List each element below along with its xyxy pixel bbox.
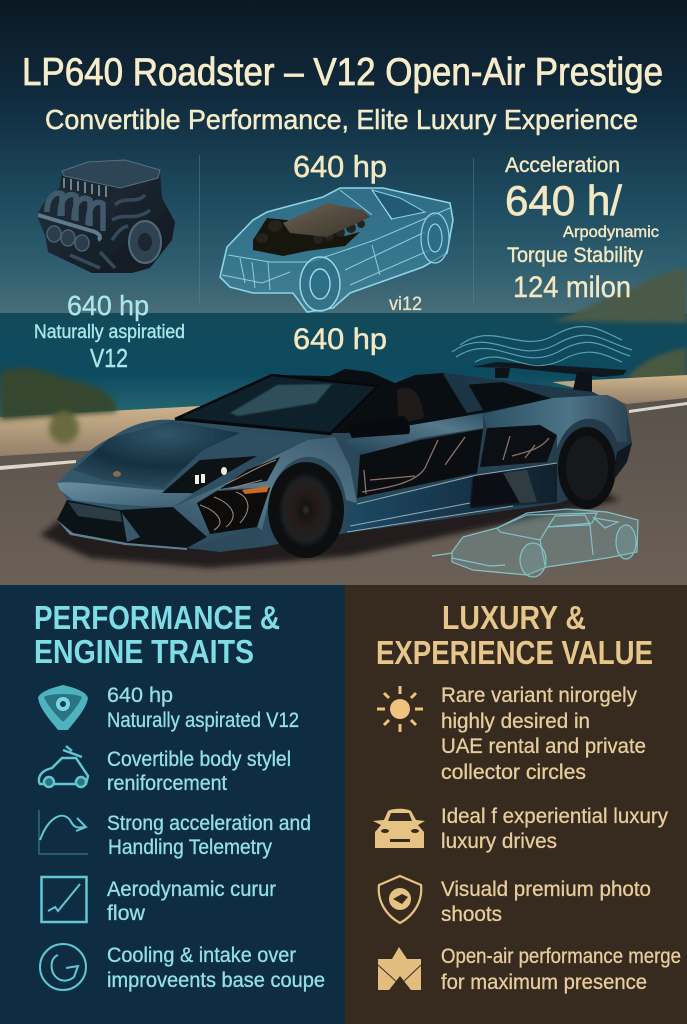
text: item 2: luxury drives <box>441 830 557 853</box>
stat: 640 hp top: 640 hp <box>293 149 387 184</box>
seat <box>397 388 424 424</box>
center fin <box>122 513 140 542</box>
stat column: acceleration: Arpodynamic <box>563 224 659 241</box>
body <box>57 395 632 550</box>
icon: star emblem <box>378 947 421 990</box>
right splitter <box>187 527 266 552</box>
icon: convertible car <box>39 746 88 787</box>
background: roadside barrier right <box>552 375 687 404</box>
side intake shadow <box>470 472 520 508</box>
text: item 1 <box>107 684 299 732</box>
subtitle: Convertible Performance, Elite Luxury Experience <box>45 104 638 135</box>
manifold bar <box>38 215 100 240</box>
icon: acceleration chart <box>39 810 88 854</box>
heading: performance: PERFORMANCE & <box>34 599 280 636</box>
text: item 2 <box>107 748 291 795</box>
text: item 1: 640 hp <box>107 684 173 707</box>
sill highlights <box>347 463 557 532</box>
text: item 5: Cooling & intake over <box>107 944 296 967</box>
stat column: engine: 640 hp <box>67 290 149 321</box>
lower bumper <box>57 500 207 548</box>
heading: performance <box>34 599 280 670</box>
text: item 1: Naturally aspirated V12 <box>107 709 299 732</box>
icon: car front <box>373 809 425 848</box>
panel: luxury and experience value <box>345 585 687 1024</box>
text: item 2: Ideal f experiential luxury <box>441 805 668 828</box>
front fender arc <box>173 437 357 538</box>
stat column: engine: Naturally aspiratied <box>34 322 185 343</box>
headlight lamps <box>195 467 227 484</box>
background: roadside barrier left <box>0 406 200 456</box>
stat column: acceleration: 640 h/ <box>505 177 622 224</box>
exposed engine <box>253 203 370 256</box>
heading: luxury <box>376 599 653 671</box>
text: item 3 <box>107 812 311 859</box>
icon: aero square <box>42 877 86 922</box>
engine illustration <box>37 160 175 273</box>
windshield frame <box>175 375 378 434</box>
text: item 5 <box>107 944 325 992</box>
background: roadside bush <box>0 368 116 444</box>
rear upper body <box>483 395 627 448</box>
hood <box>73 421 240 488</box>
text: item 4 <box>107 878 276 925</box>
stat column: engine <box>34 290 185 373</box>
lower side panel <box>347 463 557 532</box>
background: road line right <box>629 402 687 413</box>
text: item 4: flow <box>107 902 146 925</box>
text: item 1: Rare variant nirorgely <box>441 684 637 707</box>
pulley <box>129 221 161 263</box>
quarter ribs <box>503 436 549 460</box>
hero car <box>40 362 632 568</box>
divider left <box>199 155 200 303</box>
door top strip <box>345 413 483 458</box>
engine block <box>37 160 175 273</box>
background: far foliage <box>625 348 687 382</box>
wireframe rear wheel <box>421 213 449 263</box>
wireframe cabin <box>372 190 425 219</box>
heading: luxury: LUXURY & <box>442 599 586 636</box>
door dark panel <box>357 429 483 498</box>
stat column: acceleration <box>505 154 659 304</box>
background: sea <box>0 313 687 423</box>
hood fender panel <box>200 433 310 460</box>
front splitter highlight <box>57 520 187 550</box>
indicator <box>242 486 269 494</box>
car wing <box>472 362 627 392</box>
text: item 1: highly desired in <box>441 710 590 733</box>
cylinder runners <box>47 193 103 231</box>
mirror <box>346 416 410 438</box>
windshield <box>178 375 378 432</box>
icon: engine badge <box>38 685 88 730</box>
icon: shield <box>379 876 421 923</box>
fender intake <box>197 488 270 534</box>
icon: cooling circle <box>40 944 86 990</box>
wireframe body <box>220 188 453 312</box>
airflow waves <box>452 326 632 366</box>
text: item 3: Strong acceleration and <box>107 812 311 835</box>
badge <box>113 471 121 477</box>
front wheel <box>268 462 344 558</box>
right side tubes <box>70 195 150 268</box>
text: item 4: for maximum presence <box>441 971 647 994</box>
stat column: acceleration: Torque Stability <box>507 244 643 267</box>
background: road <box>0 392 687 585</box>
text: item 4: Aerodynamic curur <box>107 878 276 901</box>
stat: 640 hp middle: 640 hp <box>293 323 387 356</box>
text: item 1: UAE rental and private <box>441 735 646 758</box>
text: item 3 <box>441 878 651 926</box>
text: item 5: improveents base coupe <box>107 969 325 992</box>
background: road line left <box>0 460 76 470</box>
text: item 1: collector circles <box>441 761 586 784</box>
car shadow <box>40 490 620 568</box>
rear quarter panel <box>480 425 557 467</box>
fin bars <box>64 178 106 197</box>
rear pillar <box>443 374 483 413</box>
wireframe lines <box>222 190 450 290</box>
divider right <box>473 158 474 303</box>
stat column: engine: V12 <box>90 343 128 373</box>
stat column: acceleration: Acceleration <box>505 154 620 177</box>
rear wheel <box>558 427 616 509</box>
label: vi12: vi12 <box>389 294 422 315</box>
rear deck panel <box>443 373 623 408</box>
intake ribs <box>200 460 276 530</box>
text: item 1 <box>441 684 646 784</box>
background: coastal hill <box>552 268 687 323</box>
car cabin and interior <box>175 369 600 436</box>
text: item 2 <box>441 805 668 853</box>
upper fender vent <box>220 457 280 489</box>
door ribs <box>362 437 465 494</box>
rear bumper <box>613 443 632 481</box>
text: item 4 <box>441 945 681 994</box>
wireframe car <box>220 188 453 312</box>
text: item 2: reniforcement <box>107 772 227 795</box>
headlight <box>162 456 257 493</box>
text: item 3: Handling Telemetry <box>108 836 272 859</box>
grey bumper panel <box>68 502 122 522</box>
side vent <box>503 470 537 503</box>
wireframe front wheel <box>300 257 340 311</box>
nose lip <box>57 482 193 507</box>
stat column: acceleration: 124 milon <box>513 271 631 304</box>
lower ports <box>47 226 89 251</box>
heading: performance: ENGINE TRAITS <box>34 633 254 670</box>
text: item 3: shoots <box>441 903 502 926</box>
text: item 2: Covertible body stylel <box>107 748 291 771</box>
windshield reflection <box>230 384 332 416</box>
engine top plate <box>62 160 160 188</box>
text: item 3: Visuald premium photo <box>441 878 651 901</box>
intake fins <box>60 176 118 198</box>
hologram car lower right <box>432 509 638 577</box>
panel: performance and engine traits <box>0 585 345 1024</box>
icon: sun <box>377 686 423 732</box>
background: sky <box>0 0 687 316</box>
